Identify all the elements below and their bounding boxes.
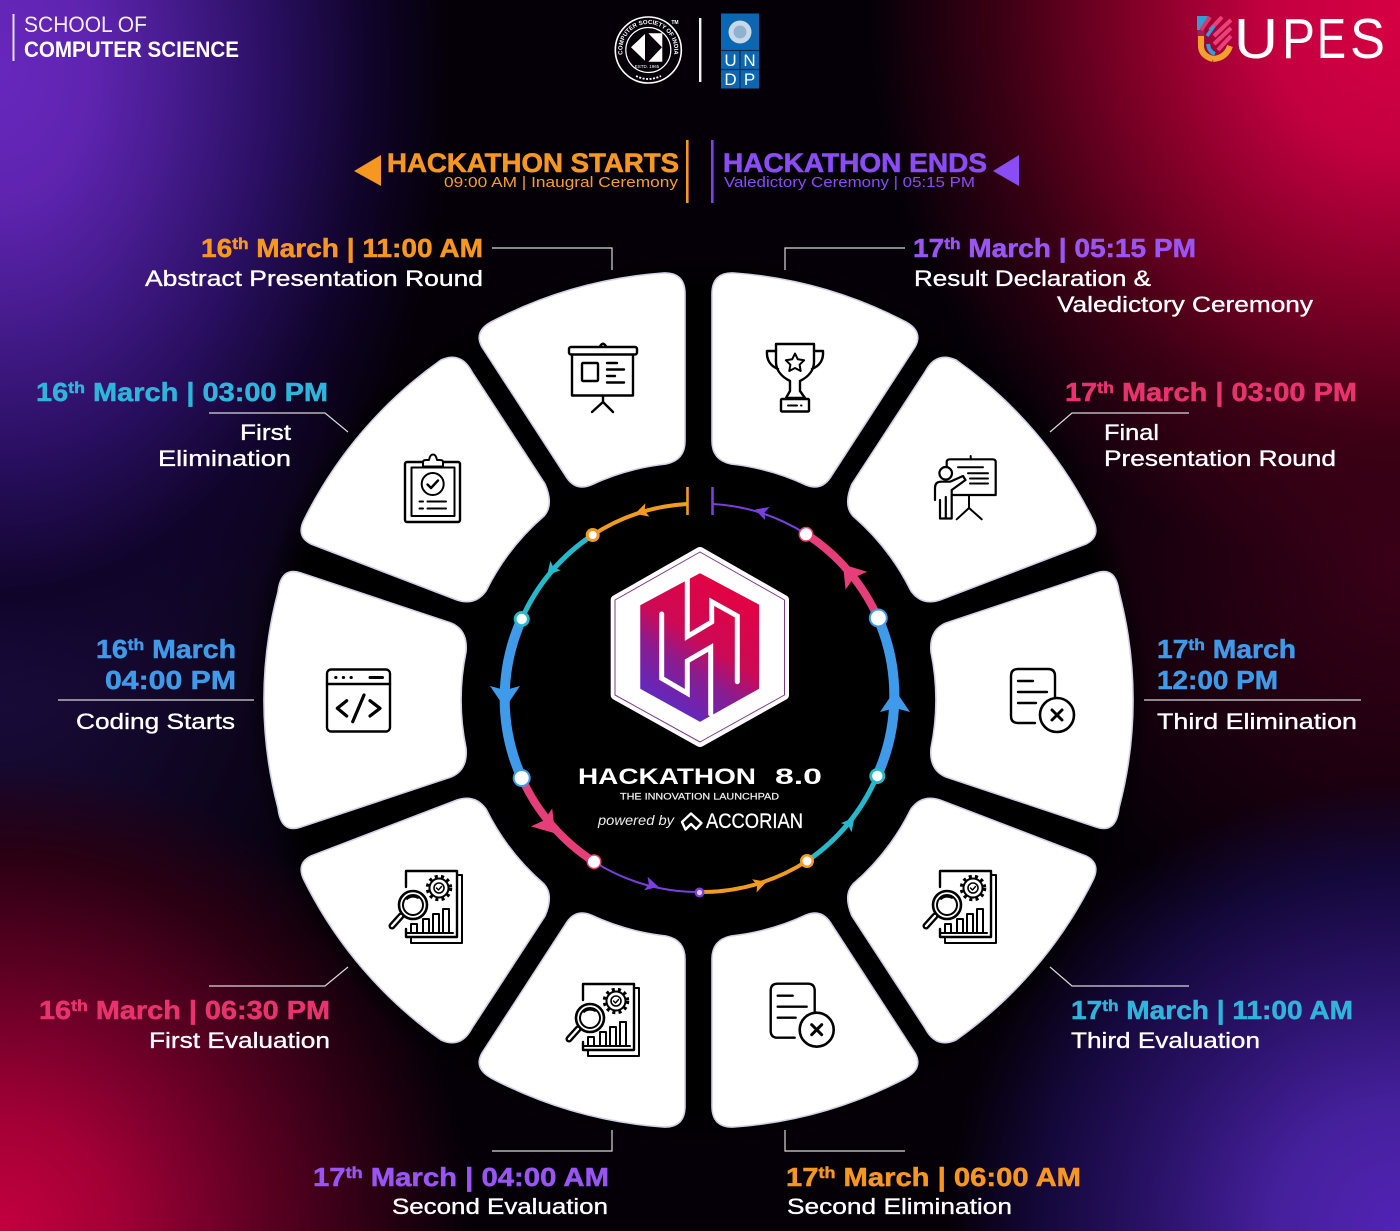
label: 17 March 11:00 AM: Third Evaluation	[1071, 1028, 1260, 1053]
panel: second elimination	[712, 913, 918, 1127]
label: 17 March 05:15 PM	[785, 233, 1313, 317]
label: 17 March 03:00 PM: 17	[1065, 377, 1094, 407]
panel: third evaluation	[848, 798, 1096, 1043]
logo: UPES	[1197, 7, 1385, 71]
timeline ring	[505, 487, 894, 892]
icon: presentation board	[569, 344, 637, 412]
logo: UNDP: N	[743, 51, 756, 70]
label: 16 March 04:00 PM: March	[144, 634, 236, 664]
label: 16 March 06:30 PM: March | 06:30 PM	[88, 995, 330, 1025]
label: 17 March 04:00 AM: March | 04:00 AM	[363, 1162, 609, 1192]
panel: abstract presentation round	[479, 273, 685, 487]
label: 17 March 12:00 PM: Third Elimination	[1157, 709, 1357, 734]
label: 17 March 06:00 AM	[785, 1130, 1081, 1219]
UPES wordmark: P	[1282, 7, 1315, 71]
divider between logos	[699, 18, 701, 82]
UPES wordmark: U	[1234, 7, 1278, 71]
label: 17 March 03:00 PM: Presentation Round	[1104, 446, 1336, 471]
label: 17 March 12:00 PM: 12:00 PM	[1157, 665, 1278, 695]
header: school of computer science: COMPUTER SCIENCE	[24, 37, 239, 62]
logo: computer society of india: COMPUTER SOCIETY OF INDIA	[618, 20, 678, 55]
icon: document with cross	[771, 984, 834, 1047]
label: 16 March 11:00 AM: 16	[201, 233, 230, 263]
start and end ticks	[686, 487, 689, 515]
label: 16 March 04:00 PM: th	[128, 637, 144, 654]
label: 16 March 06:30 PM: 16	[39, 995, 68, 1025]
hackathon hexagon logo	[615, 552, 784, 742]
label: 17 March 12:00 PM	[1144, 634, 1361, 734]
label: 16 March 11:00 AM: March | 11:00 AM	[249, 233, 483, 263]
label: 17 March 05:15 PM: Valedictory Ceremony	[1057, 292, 1313, 317]
logo: computer society of india: TM	[671, 20, 679, 26]
label: 17 March 04:00 AM: th	[346, 1165, 363, 1182]
panel: result declaration	[712, 273, 918, 487]
label: 16 March 03:00 PM: March | 03:00 PM	[85, 377, 328, 407]
label: 16 March 06:30 PM	[39, 967, 348, 1053]
label: 16 March 11:00 AM	[145, 233, 612, 291]
label: 17 March 06:00 AM: Second Elimination	[787, 1194, 1012, 1219]
label: 17 March 12:00 PM: 17	[1157, 634, 1186, 664]
powered by accorian: ACCORIAN	[706, 810, 803, 833]
header: school of computer science: SCHOOL OF	[24, 12, 147, 37]
label: 17 March 03:00 PM: th	[1097, 380, 1114, 397]
label: 17 March 06:00 AM: th	[818, 1165, 835, 1182]
panel: coding starts	[264, 572, 466, 828]
label: 17 March 05:15 PM: 17	[913, 233, 942, 263]
label: 16 March 11:00 AM: th	[232, 236, 249, 253]
label: 17 March 05:15 PM: th	[944, 236, 961, 253]
UPES wordmark: S	[1350, 7, 1385, 71]
icon: analysis report	[926, 871, 996, 943]
logo: computer society of india: ESTD. 1965	[635, 64, 660, 69]
label: 17 March 03:00 PM	[1050, 377, 1357, 471]
hackathon 8.0 title: 8.0	[775, 764, 822, 789]
panel: third elimination	[931, 572, 1133, 828]
hackathon starts banner	[354, 140, 689, 203]
label: 17 March 05:15 PM: March | 05:15 PM	[961, 233, 1196, 263]
panel: second evaluation	[479, 913, 685, 1127]
panel: first evaluation	[301, 798, 549, 1043]
hackathon ends banner	[711, 140, 1019, 203]
label: 16 March 04:00 PM	[58, 634, 254, 734]
hackathon ends banner: Valedictory Ceremony | 05:15 PM	[724, 175, 975, 191]
black hub disc and spokes	[246, 254, 1150, 1146]
icon: analysis report	[392, 871, 462, 943]
icon: code window	[327, 670, 390, 732]
icon: trophy	[767, 344, 823, 412]
label: 17 March 04:00 AM: Second Evaluation	[392, 1194, 608, 1219]
label: 17 March 12:00 PM: March	[1205, 634, 1296, 664]
label: 16 March 03:00 PM	[36, 377, 348, 471]
icon: presenter at board	[935, 456, 996, 519]
label: 16 March 04:00 PM: 16	[96, 634, 125, 664]
label: 17 March 11:00 AM	[1050, 967, 1353, 1053]
hackathon starts banner: HACKATHON STARTS	[387, 148, 679, 178]
label: 17 March 05:15 PM: Result Declaration &	[914, 266, 1151, 291]
label: 17 March 06:00 AM: 17	[786, 1162, 815, 1192]
icon: clipboard with check	[405, 454, 460, 522]
hackathon 8.0 title	[578, 764, 822, 802]
header: school of computer science	[12, 12, 239, 62]
powered by accorian: powered by	[597, 813, 675, 828]
hackathon 8.0 title: HACKATHON	[578, 764, 756, 789]
powered by accorian	[597, 810, 803, 833]
label: 16 March 06:30 PM: th	[71, 998, 88, 1015]
panel: final presentation round	[848, 357, 1096, 602]
icon: document with cross	[1011, 669, 1074, 732]
label: 16 March 03:00 PM: 16	[36, 377, 65, 407]
logo: UNDP: D	[724, 70, 737, 89]
label: 17 March 03:00 PM: March | 03:00 PM	[1114, 377, 1357, 407]
label: 16 March 11:00 AM: Abstract Presentation Round	[145, 266, 483, 291]
label: 17 March 11:00 AM: 17	[1071, 995, 1100, 1025]
label: 16 March 03:00 PM: Elimination	[158, 446, 291, 471]
logo: UNDP	[721, 14, 759, 89]
icon: UPES shield	[1197, 16, 1231, 59]
logo: UNDP: P	[744, 70, 755, 89]
logo: UNDP: U	[724, 51, 737, 70]
label: 17 March 12:00 PM: th	[1188, 637, 1205, 654]
UPES wordmark: E	[1317, 7, 1346, 71]
hackathon starts banner: 09:00 AM | Inaugral Ceremony	[444, 175, 679, 191]
label: 16 March 03:00 PM: First	[240, 420, 291, 445]
label: 17 March 11:00 AM: th	[1102, 998, 1119, 1015]
label: 17 March 11:00 AM: March | 11:00 AM	[1119, 995, 1353, 1025]
ring arrows	[490, 503, 910, 893]
hackathon 8.0 title: THE INNOVATION LAUNCHPAD	[620, 792, 780, 802]
label: 16 March 04:00 PM: Coding Starts	[76, 709, 235, 734]
UPES wordmark	[1234, 7, 1385, 71]
label: 16 March 06:30 PM: First Evaluation	[149, 1028, 330, 1053]
label: 16 March 04:00 PM: 04:00 PM	[105, 665, 236, 695]
ring nodes	[513, 527, 888, 898]
panel: first elimination	[301, 357, 549, 602]
label: 17 March 03:00 PM: Final	[1104, 420, 1159, 445]
icon: analysis report	[569, 984, 639, 1056]
logo: computer society of india	[614, 16, 682, 84]
label: 16 March 03:00 PM: th	[68, 380, 85, 397]
label: 17 March 04:00 AM	[313, 1130, 612, 1219]
hackathon ends banner: HACKATHON ENDS	[723, 148, 987, 178]
label: 17 March 06:00 AM: March | 06:00 AM	[835, 1162, 1081, 1192]
label: 17 March 04:00 AM: 17	[313, 1162, 342, 1192]
